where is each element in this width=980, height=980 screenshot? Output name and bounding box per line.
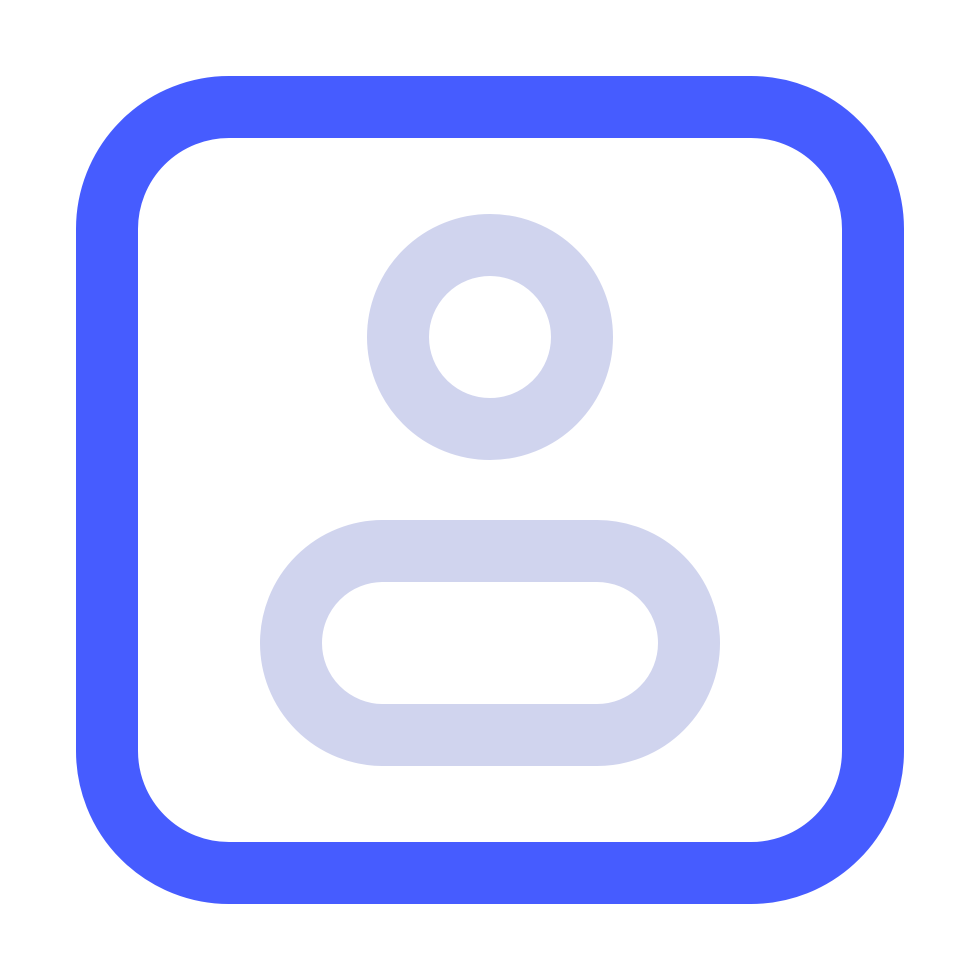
icon: user body pill bbox=[291, 551, 689, 735]
icon: rounded square frame bbox=[107, 107, 873, 873]
icon: user head circle bbox=[398, 245, 582, 429]
